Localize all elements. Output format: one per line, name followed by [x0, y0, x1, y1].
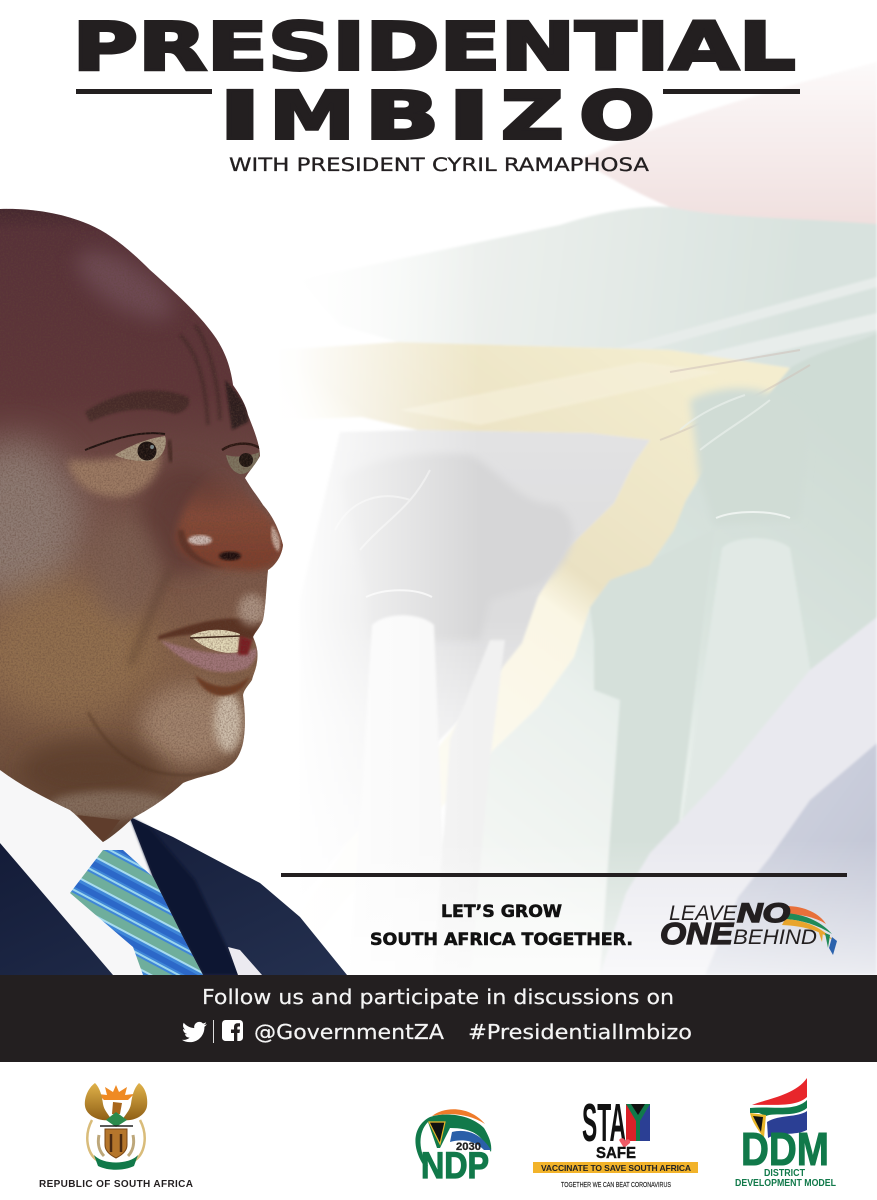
- near eye: [115, 436, 166, 461]
- far eye: [226, 452, 260, 474]
- logo caption: REPUBLIC OF SOUTH AFRICA: [39, 1179, 193, 1190]
- swoosh: [785, 906, 826, 924]
- hashtag: #PresidentialImbizo: [468, 1020, 692, 1044]
- Stay Safe logo: TOGETHER WE CAN BEAT CORONAVIRUS: [561, 1182, 671, 1189]
- slogan: LET’S GROW: [441, 902, 562, 921]
- title: Imbizo: M: [269, 78, 355, 154]
- neck shadow: [77, 815, 120, 842]
- title: Presidential: PRESIDENTIAL: [72, 8, 796, 86]
- Leave No One Behind logo: LEAVE: [669, 902, 738, 925]
- Leave No One Behind logo: ONE: [660, 916, 734, 951]
- right column capital: [680, 388, 810, 525]
- jaw line: [88, 712, 215, 775]
- head: [0, 200, 300, 850]
- flag Y: [626, 1104, 650, 1141]
- District Development Model logo: DISTRICT: [764, 1168, 805, 1179]
- Stay Safe logo: [533, 1093, 698, 1189]
- District Development Model logo: DEVELOPMENT MODEL: [735, 1178, 836, 1189]
- pin: [228, 947, 262, 975]
- Leave No One Behind logo: NO: [737, 898, 790, 928]
- mouth: [158, 618, 262, 640]
- shirt and collar: [0, 770, 203, 975]
- District Development Model logo: [735, 1078, 836, 1189]
- left column capital: [335, 454, 573, 975]
- NDP 2030 logo: [415, 1109, 491, 1186]
- social media band: [0, 975, 877, 1062]
- NDP 2030 logo: NDP: [421, 1145, 489, 1186]
- Stay Safe logo: VACCINATE TO SAVE SOUTH AFRICA: [541, 1163, 691, 1173]
- coat of arms logo: [39, 1083, 193, 1190]
- eyebrow: [85, 390, 189, 422]
- title rule right: [663, 89, 800, 94]
- Stay Safe logo: SAFE: [596, 1145, 636, 1162]
- icon: twitter: [182, 1022, 207, 1042]
- title: Imbizo: I: [218, 78, 262, 154]
- slogan: [370, 902, 633, 949]
- lapel shadow: [130, 817, 240, 975]
- Leave No One Behind logo: [660, 898, 837, 955]
- band heading: Follow us and participate in discussions on: [202, 985, 674, 1009]
- title: Imbizo: Z: [501, 78, 564, 154]
- slogan: SOUTH AFRICA TOGETHER.: [370, 930, 633, 949]
- nasolabial fold: [130, 570, 170, 665]
- brow creases: [180, 325, 220, 425]
- Stay Safe logo: STA: [582, 1093, 626, 1153]
- icon: facebook: [222, 1020, 243, 1041]
- subtitle: WITH PRESIDENT CYRIL RAMAPHOSA: [229, 155, 649, 176]
- background: faded flag and columns: [250, 62, 877, 980]
- jacket: [0, 817, 347, 975]
- twitter handle: @GovernmentZA: [254, 1020, 444, 1044]
- portrait of the President: [0, 200, 347, 975]
- rule above slogan: [281, 873, 847, 877]
- District Development Model logo: DDM: [741, 1123, 829, 1175]
- nose: [174, 485, 283, 574]
- title: Imbizo: I: [448, 78, 490, 154]
- NDP 2030 logo: 2030: [456, 1141, 481, 1153]
- title: Imbizo: B: [364, 78, 440, 154]
- skin texture: [0, 200, 300, 850]
- eye bag: [68, 450, 161, 497]
- coat of arms emblem: [85, 1083, 147, 1170]
- title: Imbizo: [218, 78, 655, 154]
- Leave No One Behind logo: BEHIND: [733, 926, 817, 949]
- title rule left: [76, 89, 212, 94]
- tie: [70, 850, 203, 975]
- title: Imbizo: O: [579, 78, 655, 154]
